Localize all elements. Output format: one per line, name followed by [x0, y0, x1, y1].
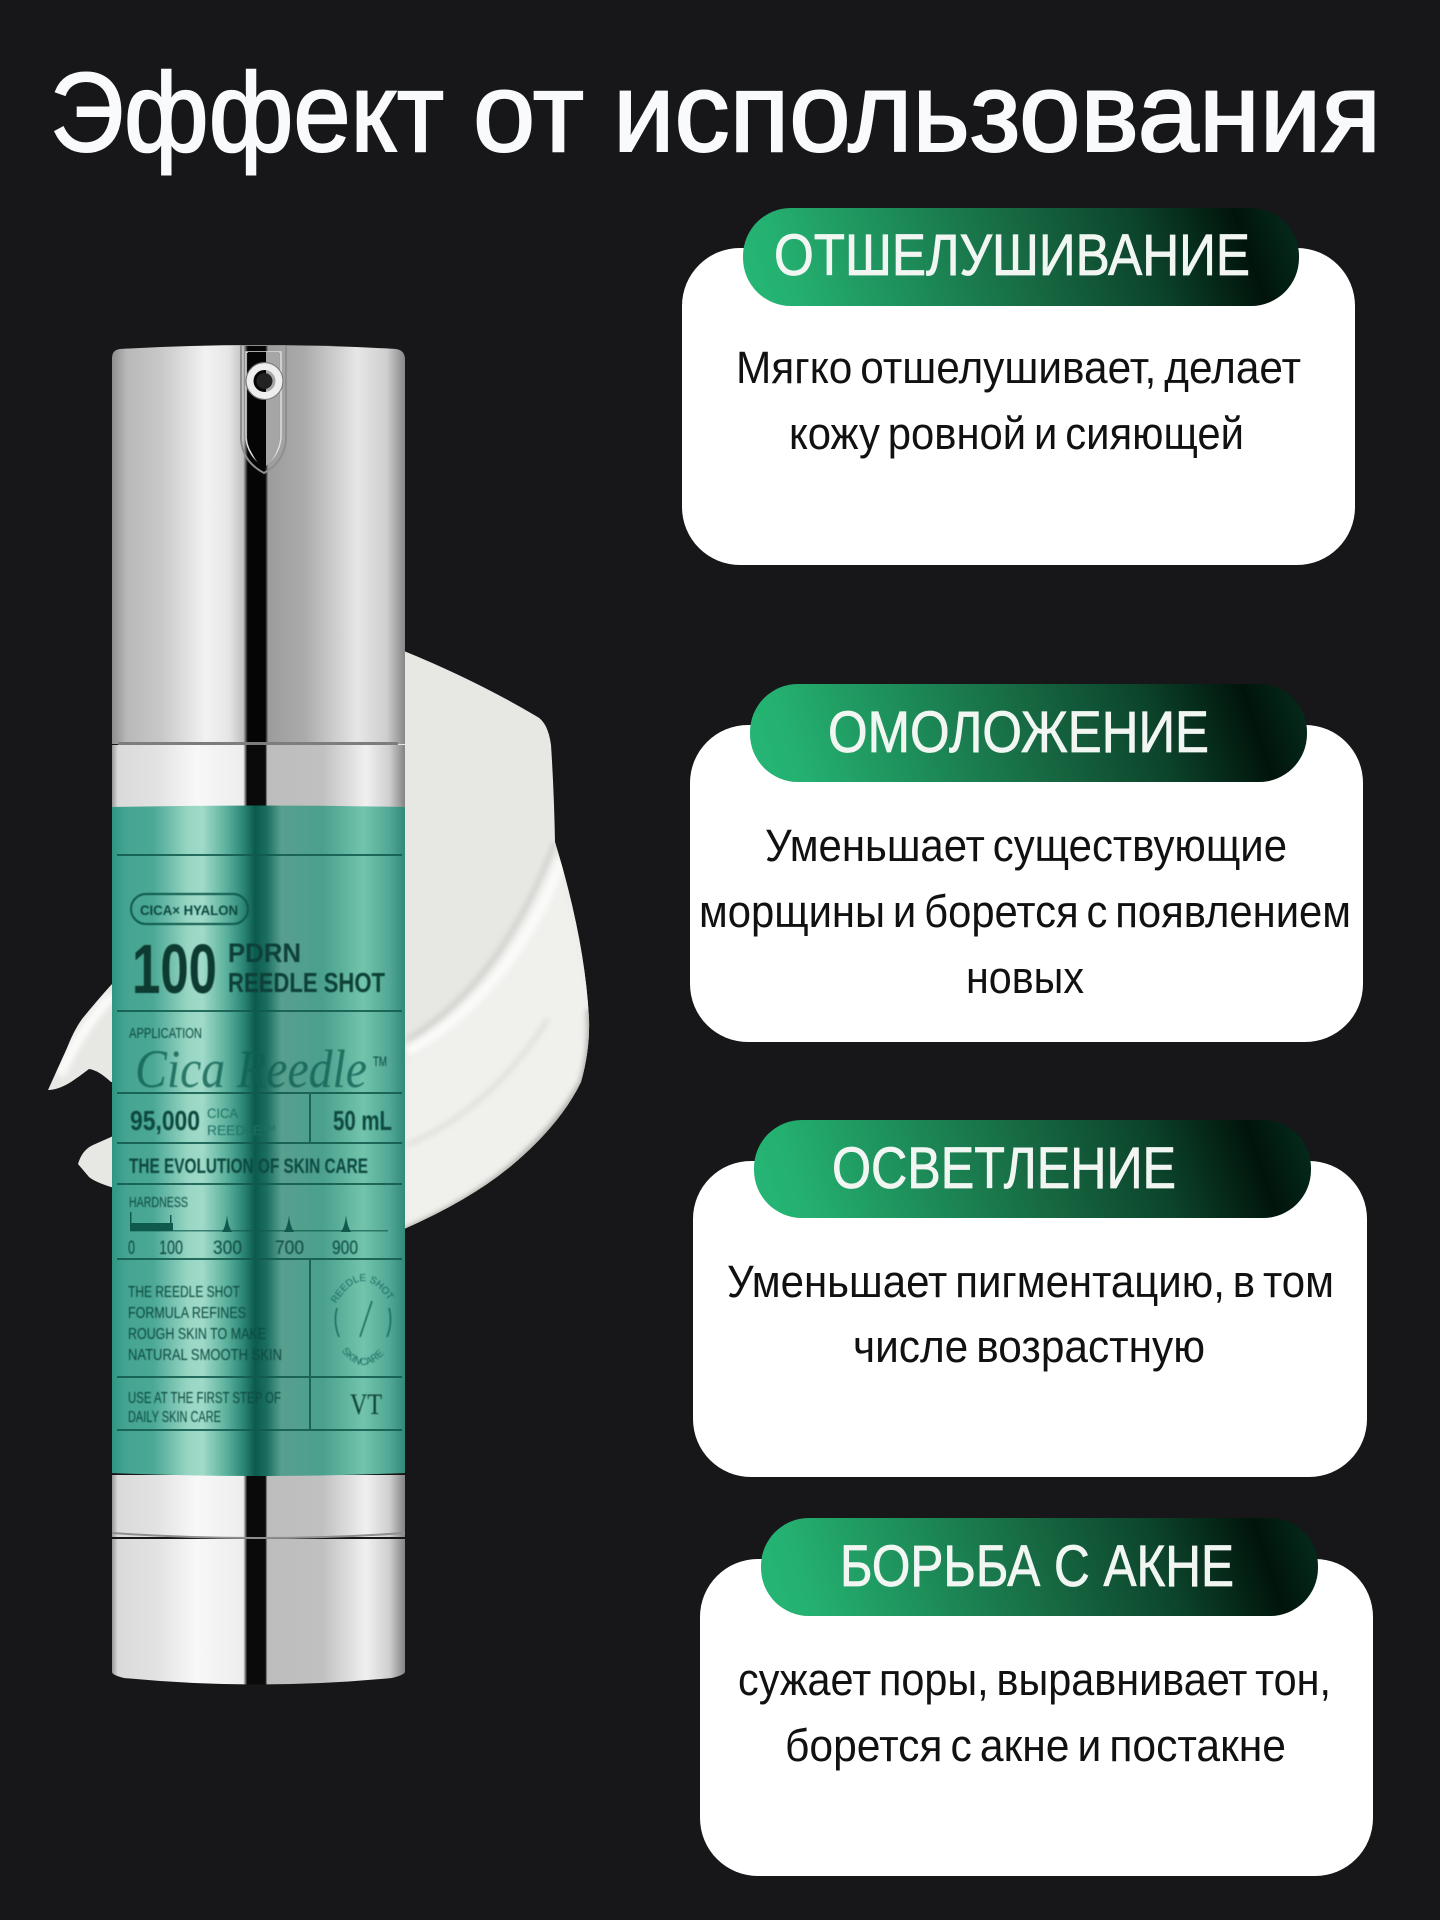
title: от — [473, 50, 584, 175]
label text: TM — [373, 1053, 387, 1069]
card text — [736, 342, 1301, 459]
card heading pill: ОМОЛОЖЕНИЕ — [828, 700, 1209, 765]
label text: 300 — [213, 1238, 242, 1259]
label text: 100 — [159, 1238, 183, 1259]
card heading pill — [750, 684, 1307, 782]
title: использования — [613, 50, 1381, 175]
card text: кожу ровной и сияющей — [789, 408, 1244, 459]
card: acne — [700, 1518, 1373, 1876]
title: Эффект — [50, 50, 444, 175]
card body — [693, 1161, 1367, 1477]
label text: HARDNESS — [129, 1194, 188, 1211]
label text: Cica Reedle — [135, 1039, 367, 1099]
card heading pill — [754, 1120, 1311, 1218]
label text: FORMULA REFINES — [128, 1305, 246, 1322]
label text: REEDLE™ — [207, 1122, 276, 1138]
card heading pill: ОТШЕЛУШИВАНИЕ — [774, 223, 1250, 288]
label text: APPLICATION — [129, 1025, 202, 1042]
label text: CICA× HYALON — [140, 902, 238, 918]
bottle base ring — [112, 1475, 405, 1537]
label text: REEDLE SHOT — [228, 967, 385, 998]
card text: морщины и борется с появлением — [699, 886, 1351, 937]
bottle base — [112, 1539, 405, 1694]
card body — [700, 1559, 1373, 1876]
card text: Уменьшает пигментацию, в том — [727, 1256, 1334, 1307]
nozzle ring — [246, 362, 283, 400]
green label — [112, 806, 405, 1476]
card heading pill: БОРЬБА С АКНЕ — [840, 1534, 1234, 1599]
card text: борется с акне и постакне — [785, 1720, 1286, 1771]
card heading pill: ОСВЕТЛЕНИЕ — [832, 1136, 1176, 1201]
label text: ROUGH SKIN TO MAKE — [128, 1326, 266, 1343]
label text: THE EVOLUTION OF SKIN CARE — [129, 1155, 368, 1178]
label text: 0 — [128, 1238, 135, 1259]
card text: новых — [966, 952, 1084, 1003]
card heading pill — [761, 1518, 1318, 1616]
label text — [128, 894, 392, 1426]
card body — [682, 248, 1355, 565]
cream swatch — [48, 652, 590, 1228]
label text: PDRN — [228, 938, 301, 968]
label text: USE AT THE FIRST STEP OF — [128, 1390, 281, 1407]
title — [50, 50, 1381, 175]
seal stamp: SKINCARE — [342, 1347, 384, 1366]
hardness scale — [130, 1212, 388, 1232]
label text: DAILY SKIN CARE — [128, 1409, 221, 1426]
card text — [727, 1256, 1334, 1372]
card text: сужает поры, выравнивает тон, — [738, 1654, 1331, 1705]
card heading pill — [743, 208, 1299, 306]
card text — [699, 820, 1351, 1003]
card text: Уменьшает существующие — [765, 820, 1287, 871]
label text: CICA — [207, 1105, 239, 1121]
label text: VT — [350, 1388, 382, 1421]
card text: Мягко отшелушивает, делает — [736, 342, 1301, 393]
cap seam — [118, 742, 398, 745]
label text: 700 — [275, 1238, 304, 1259]
nozzle slot — [241, 345, 286, 473]
seal stamp — [330, 1274, 394, 1366]
label rule lines — [117, 855, 402, 1431]
label text: THE REEDLE SHOT — [128, 1284, 240, 1301]
card body — [690, 725, 1363, 1042]
card: brightening — [693, 1120, 1367, 1477]
label text: 900 — [332, 1238, 358, 1259]
card: exfoliation — [682, 208, 1355, 565]
label text: 50 mL — [333, 1105, 392, 1136]
card: rejuvenation — [690, 684, 1363, 1042]
card text: числе возрастную — [853, 1321, 1205, 1372]
bottle collar — [112, 745, 405, 808]
seal stamp: REEDLE SHOT — [330, 1274, 394, 1304]
label text: NATURAL SMOOTH SKIN — [128, 1347, 282, 1364]
bottle cap — [112, 340, 405, 744]
card text — [738, 1654, 1331, 1771]
product bottle — [112, 345, 405, 1684]
label text: 100 — [132, 930, 217, 1008]
label text: 95,000 — [130, 1105, 200, 1136]
